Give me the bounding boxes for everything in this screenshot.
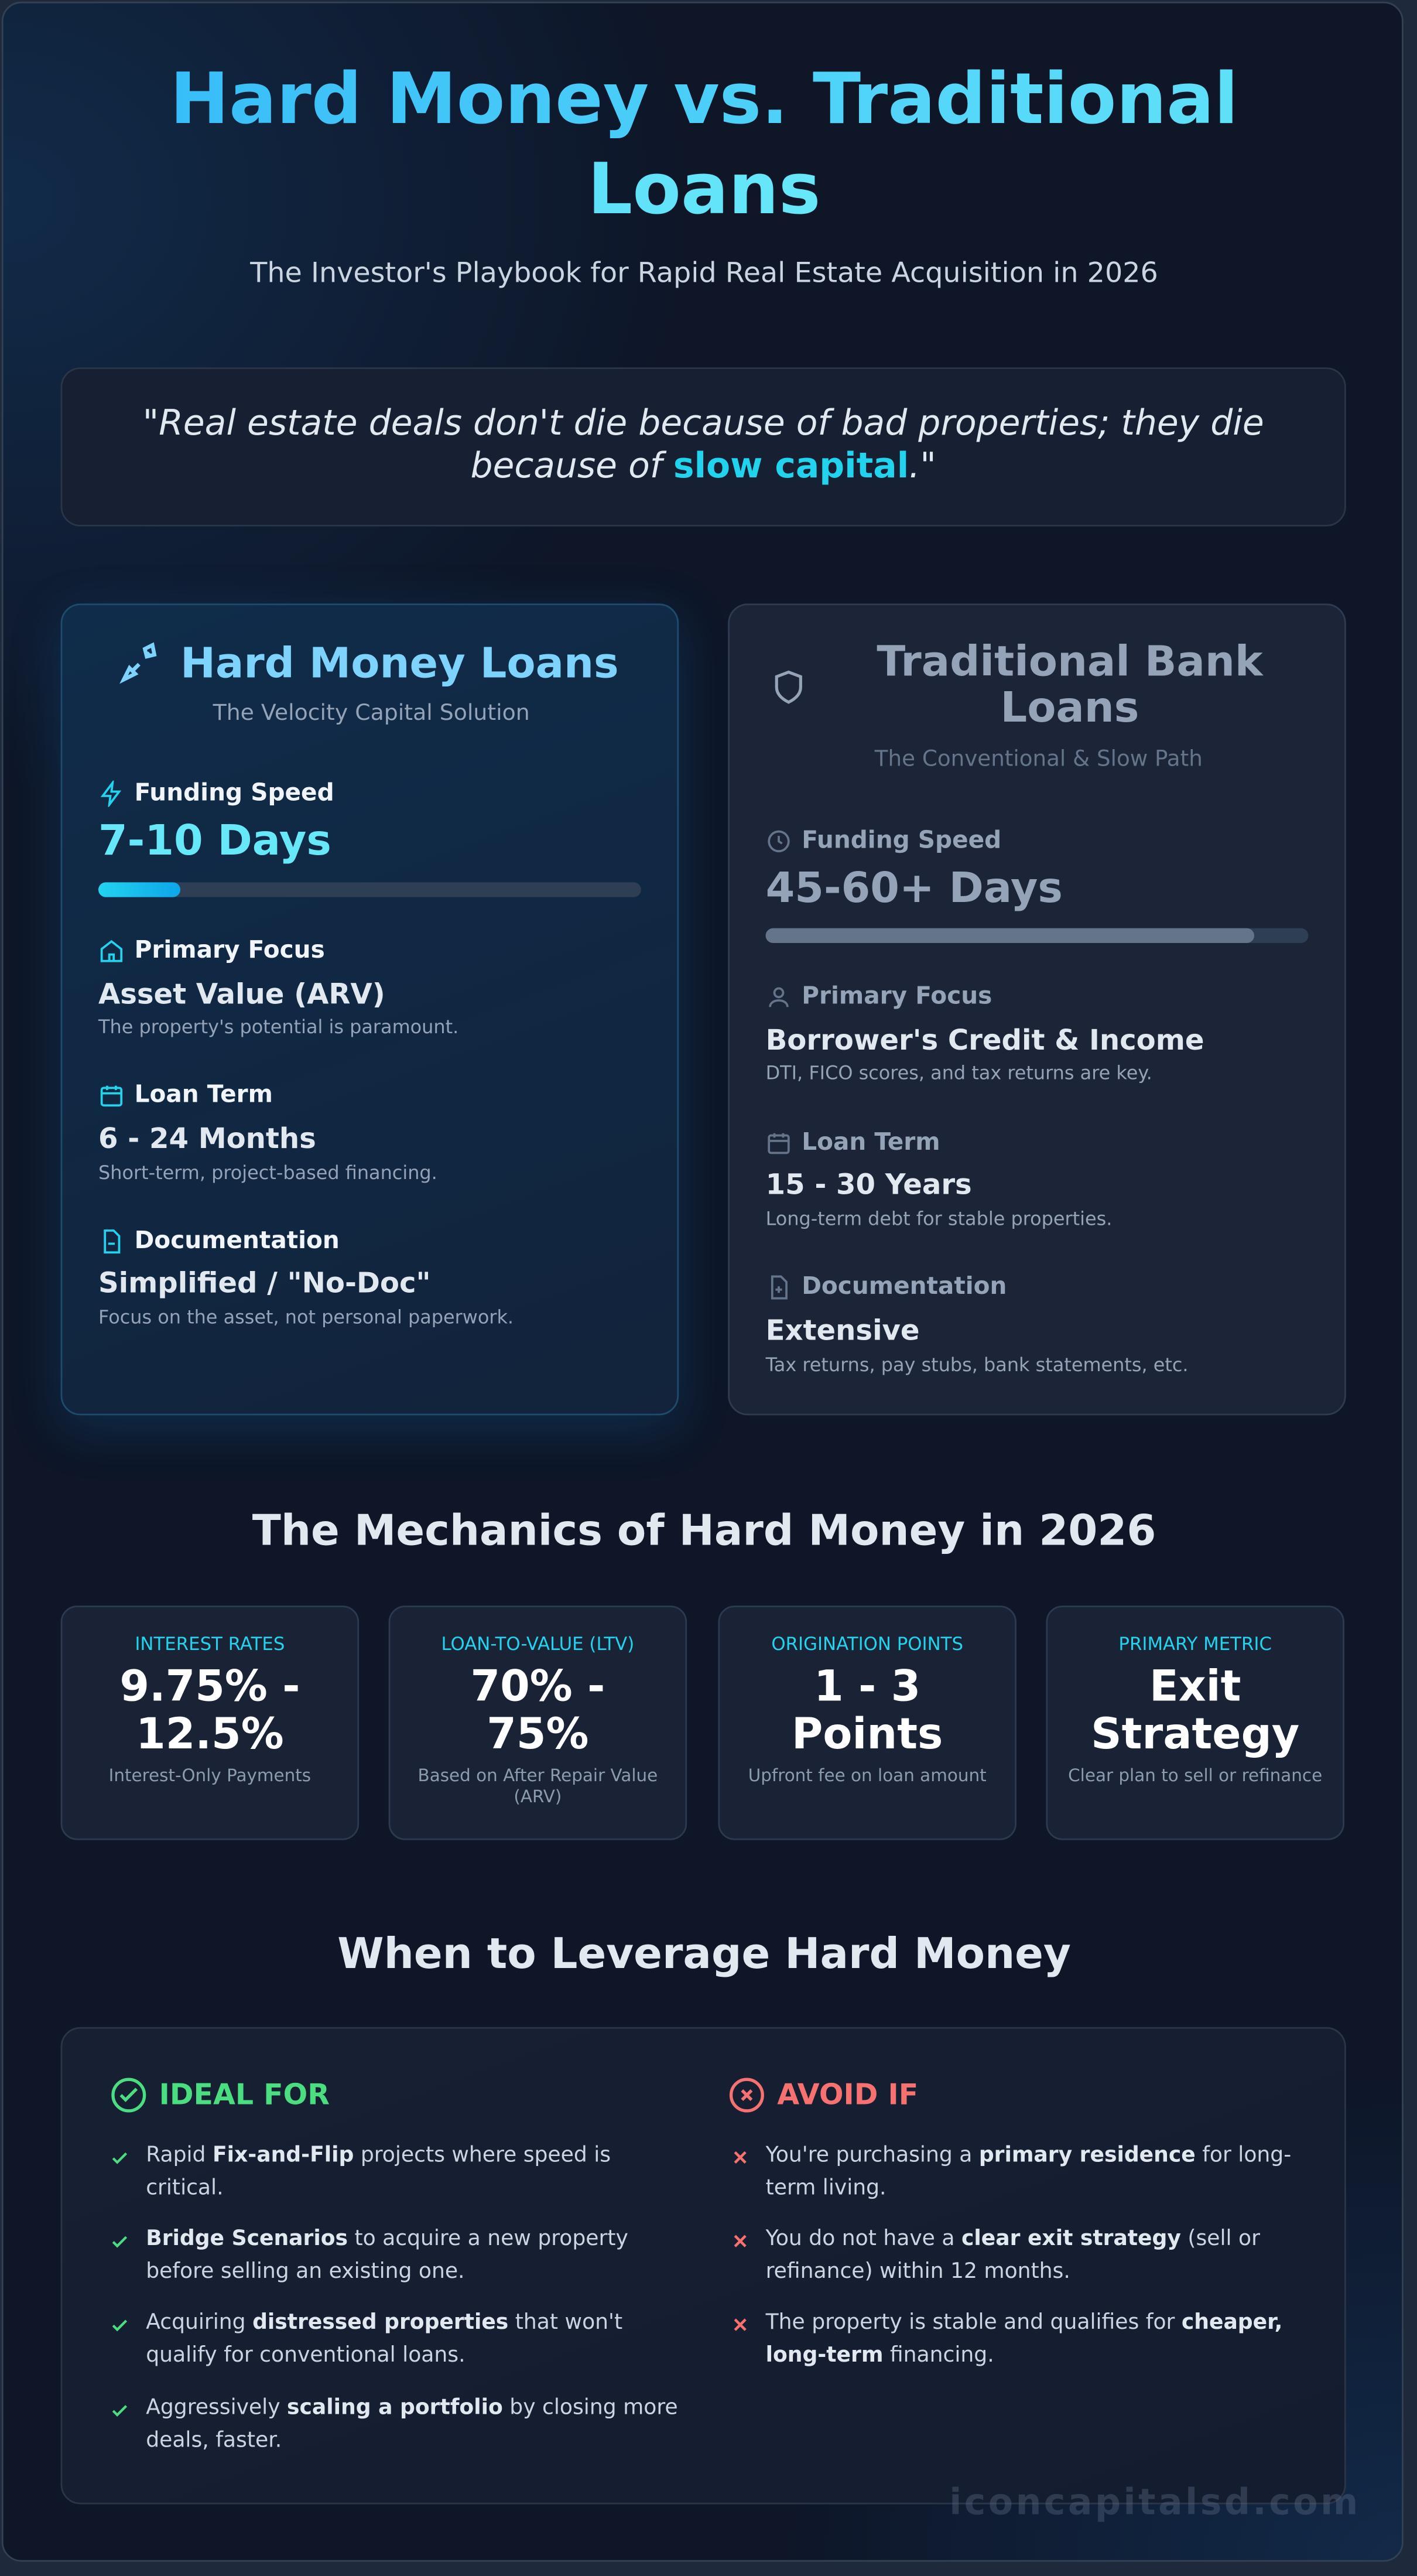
panel: traditional bank loans: Tax returns, pay stubs, bank statements, etc. (766, 1353, 1189, 1376)
stat: origination points: Points (792, 1710, 943, 1760)
panel: ideal / avoid: You do not have a clear exit strategy (sell or refinance) within 12 months. (766, 2227, 1260, 2284)
panel: traditional bank loans: Long-term debt for stable properties. (766, 1207, 1112, 1230)
item: documentation: Documentation (802, 1275, 1007, 1300)
heading: hard money loans: Hard Money Loans (180, 640, 619, 689)
item: primary focus: Primary Focus (135, 938, 325, 964)
panel: ideal / avoid: The property is stable and qualifies for cheaper, long-term financing. (766, 2311, 1282, 2368)
panel: traditional bank loans (728, 603, 1346, 1415)
item: primary focus: Primary Focus (802, 984, 992, 1010)
panel: hard money loans: Short-term, project-based financing. (98, 1161, 437, 1184)
panel: hard money loans: 6 - 24 Months (98, 1123, 316, 1156)
stat: interest rates: 9.75% - (119, 1663, 300, 1712)
stat: ltv: 75% (487, 1710, 589, 1760)
panel: hard money loans: The Velocity Capital Solution (213, 701, 530, 726)
panel: traditional bank loans: DTI, FICO scores, and tax returns are key. (766, 1061, 1152, 1084)
panel: traditional bank loans: The Conventional & Slow Path (875, 748, 1203, 773)
item: loan term: Loan Term (135, 1082, 273, 1109)
item: funding speed: Funding Speed (135, 781, 334, 807)
stat: interest rates: INTEREST RATES (135, 1634, 285, 1655)
stat: interest rates: 12.5% (136, 1710, 284, 1760)
panel: traditional bank loans: 15 - 30 Years (766, 1169, 972, 1202)
item: loan term: Loan Term (802, 1130, 940, 1156)
heading: traditional bank loans: Traditional Bank (877, 638, 1263, 687)
panel: ideal / avoid: Acquiring distressed properties that won't qualify for conventional loans. (146, 2311, 622, 2368)
panel: hard money loans (61, 603, 679, 1415)
panel: traditional bank loans: Extensive (766, 1316, 920, 1348)
stat: origination points: 1 - 3 (814, 1663, 920, 1712)
panel: ideal / avoid: Rapid Fix-and-Flip projects where speed is critical. (146, 2144, 611, 2201)
panel: ideal / avoid (61, 2027, 1346, 2505)
item: documentation: Documentation (135, 1228, 340, 1255)
heading: traditional bank loans (877, 638, 1264, 733)
stat: interest rates (61, 1605, 359, 1840)
stat: ltv: Based on After Repair Value (ARV) (418, 1767, 658, 1808)
stat: interest rates: Interest-Only Payments (109, 1767, 311, 1786)
panel: hard money loans: Simplified / "No-Doc" (98, 1267, 431, 1300)
stat: origination points: Upfront fee on loan amount (748, 1767, 987, 1786)
panel: ideal / avoid: You're purchasing a primary residence for long-​term living. (766, 2144, 1291, 2201)
icon: shield (775, 670, 802, 704)
list: avoid if (734, 2144, 1291, 2368)
heading: avoid if: AVOID IF (777, 2079, 918, 2112)
quote box: because of slow capital." (471, 446, 936, 487)
stat: primary metric: Strategy (1091, 1710, 1299, 1760)
stat: ltv: LOAN-TO-VALUE (LTV) (441, 1634, 634, 1655)
panel: hard money loans: Asset Value (ARV) (98, 979, 385, 1012)
heading: traditional bank loans: Loans (1001, 684, 1139, 733)
stat: ltv: 70% - (470, 1663, 605, 1712)
stat: origination points (718, 1605, 1016, 1840)
list: ideal for (112, 2144, 678, 2454)
quote box (61, 367, 1346, 527)
heading: when to leverage: When to Leverage Hard Money (337, 1931, 1071, 1980)
panel: hard money loans: 7-10 Days (98, 816, 331, 866)
panel: hard money loans: The property's potential is paramount. (98, 1015, 458, 1038)
title (170, 59, 1238, 231)
watermark: iconcapitalsd.com (949, 2483, 1361, 2524)
title: Hard Money vs. Traditional (170, 59, 1238, 141)
stat: primary metric: Exit (1149, 1663, 1241, 1712)
stat: primary metric (1046, 1605, 1344, 1840)
stat: origination points: ORIGINATION POINTS (771, 1634, 963, 1655)
stat: primary metric: PRIMARY METRIC (1118, 1634, 1272, 1655)
panel: ideal / avoid: Bridge Scenarios to acquire a new property before selling an existing one. (146, 2227, 628, 2284)
panel: hard money loans: Focus on the asset, not personal paperwork. (98, 1306, 514, 1328)
subtitle: The Investor's Playbook for Rapid Real Estate Acquisition in 2026 (250, 258, 1158, 291)
heading: mechanics: The Mechanics of Hard Money in 2026 (252, 1507, 1156, 1556)
quote box: "Real estate deals don't die because of bad properties; they die (143, 404, 1264, 445)
stat: ltv (389, 1605, 687, 1840)
title: Loans (588, 149, 821, 231)
item: funding speed: Funding Speed (802, 828, 1001, 855)
heading: ideal for: IDEAL FOR (159, 2079, 330, 2112)
stat: primary metric: Clear plan to sell or refinance (1068, 1767, 1322, 1786)
panel: traditional bank loans: Borrower's Credit & Income (766, 1025, 1204, 1058)
panel: traditional bank loans: 45-60+ Days (766, 865, 1063, 914)
panel: ideal / avoid: Aggressively scaling a portfolio by closing more deals, faster. (146, 2396, 678, 2454)
